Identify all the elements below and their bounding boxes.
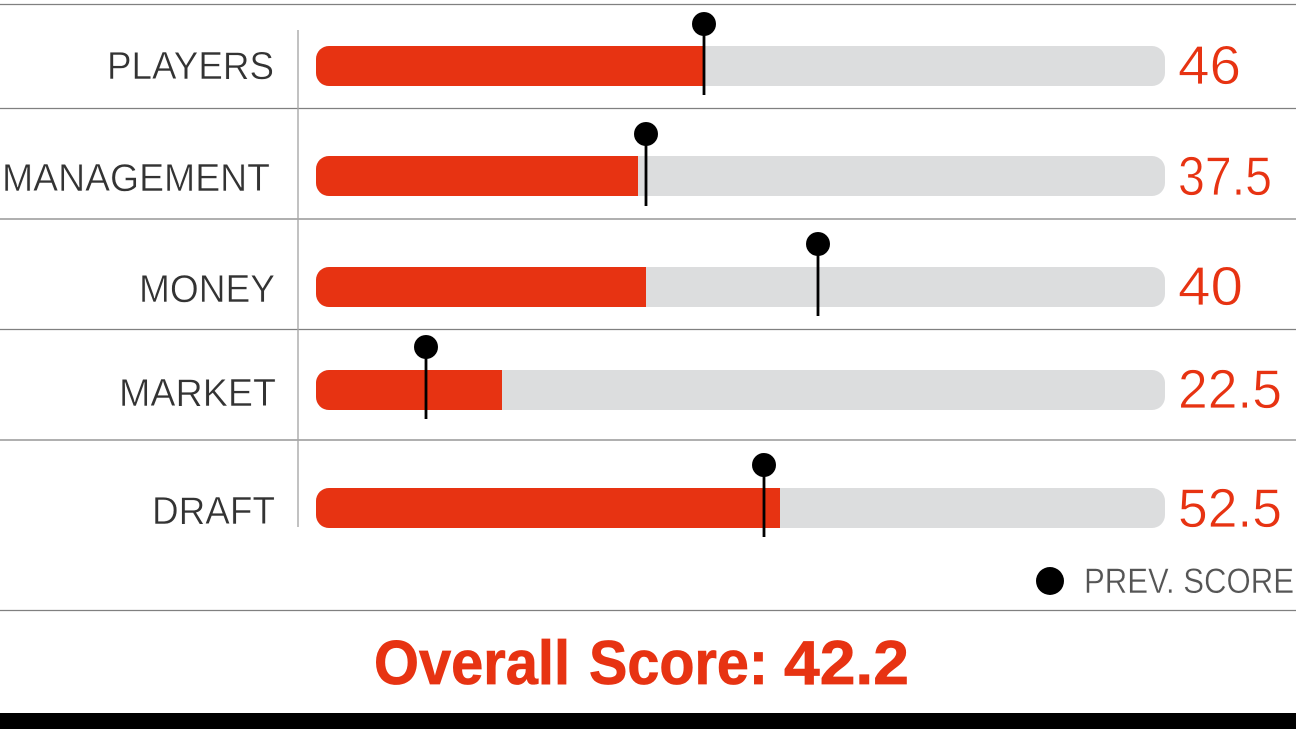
overall score: Overall <box>374 629 570 698</box>
row: money: MONEY <box>139 268 275 311</box>
row: management: 37.5 <box>1178 145 1272 207</box>
row: players: PLAYERS <box>107 45 274 88</box>
overall score: Score: <box>589 629 768 698</box>
overall score: 42.2 <box>784 629 909 698</box>
row: money <box>139 232 1243 317</box>
row: draft: DRAFT <box>152 490 275 533</box>
bottom black band <box>0 713 1296 729</box>
row: money: 40 <box>1178 255 1243 317</box>
row: management: MANAGEMENT <box>2 157 270 200</box>
row: market: 22.5 <box>1178 358 1282 420</box>
row: players: 46 <box>1178 34 1241 96</box>
row: management <box>2 122 1272 207</box>
row: draft: 52.5 <box>1178 477 1282 539</box>
row: market <box>119 335 1282 420</box>
row: market: MARKET <box>119 372 276 415</box>
row: players <box>107 12 1241 96</box>
row: draft <box>152 453 1282 539</box>
overall score <box>374 629 909 698</box>
